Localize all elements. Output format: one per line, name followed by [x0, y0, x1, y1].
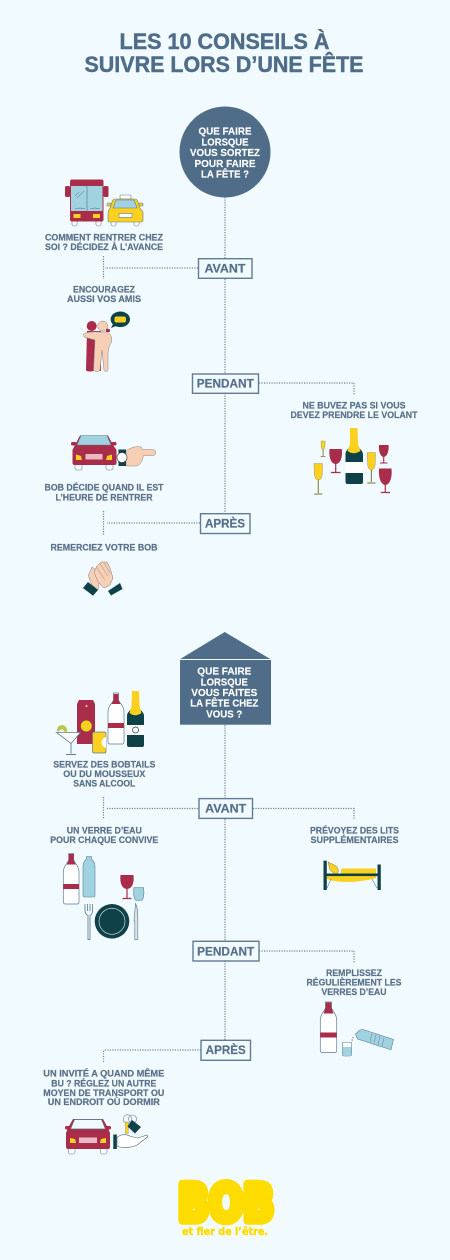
- can: [92, 732, 106, 753]
- flutes: [321, 441, 325, 450]
- water bottle: [83, 856, 95, 897]
- house: que faire lorsque vous faites la fête: VOUS ?: [206, 709, 242, 721]
- bottle: [63, 854, 79, 904]
- label: avant: AVANT: [204, 263, 246, 275]
- fork: [85, 904, 92, 940]
- label: après: [200, 514, 250, 534]
- text: prévoyez: [310, 825, 399, 845]
- label: après: APRÈS: [205, 518, 245, 531]
- house: que faire lorsque vous faites la fête: [180, 632, 271, 725]
- title: SUIVRE LORS D’UNE FÊTE: [84, 52, 364, 77]
- text: encouragez: [67, 284, 141, 304]
- text: un verre d'eau: POUR CHAQUE CONVIVE: [50, 835, 158, 845]
- water glass: [134, 888, 144, 900]
- text: comment rentrer: COMMENT RENTRER CHEZ: [45, 232, 163, 242]
- text: servez: SANS ALCOOL: [73, 778, 136, 788]
- icon: clapping hands: [83, 562, 122, 596]
- icon: hand with keys: [113, 1115, 148, 1149]
- label: pendant 2: PENDANT: [197, 946, 254, 958]
- circle: que faire lorsque vous sortez: POUR FAIRE: [194, 158, 256, 170]
- carton: [77, 700, 95, 744]
- text: un verre d'eau: UN VERRE D’EAU: [67, 825, 142, 835]
- label: après 2: APRÈS: [206, 1044, 246, 1057]
- text: remplissez: RÉGULIÈREMENT LES: [306, 978, 402, 988]
- house: que faire lorsque vous faites la fête: LORSQUE: [201, 676, 248, 688]
- text: prévoyez: SUPPLÉMENTAIRES: [310, 835, 398, 845]
- label: avant 2: [199, 799, 252, 818]
- icon: bus: [65, 180, 108, 226]
- circle: que faire lorsque vous sortez: LA FÊTE ?: [201, 168, 249, 181]
- label: après 2: [201, 1040, 250, 1060]
- text: remplissez: VERRES D’EAU: [322, 987, 386, 997]
- text: bob décide: L’HEURE DE RENTRER: [56, 492, 153, 502]
- text: remplissez: REMPLISSEZ: [326, 968, 382, 978]
- house: que faire lorsque vous faites la fête: LA FÊTE CHEZ: [190, 697, 259, 710]
- champagne: [127, 691, 144, 747]
- text: ne buvez pas: [290, 400, 418, 420]
- text: un invité: UN INVITÉ A QUAND MÊME: [43, 1068, 164, 1079]
- title: LES 10 CONSEILS À: [120, 29, 330, 54]
- text: ne buvez pas: NE BUVEZ PAS SI VOUS: [302, 400, 406, 410]
- text: un invité: UN ENDROIT OÙ DORMIR: [48, 1096, 160, 1107]
- icon: speech bubble BOB: [111, 312, 130, 328]
- text: comment rentrer: SOI ? DÉCIDEZ À L’AVANCE: [45, 242, 163, 252]
- label: pendant 2: [193, 941, 259, 961]
- house: que faire lorsque vous faites la fête: VOUS FAITES: [191, 687, 257, 699]
- text: remerciez: REMERCIEZ VOTRE BOB: [50, 542, 158, 552]
- timeline: chez vous: [104, 725, 354, 1062]
- timeline: sortir: [104, 197, 354, 535]
- label: pendant: PENDANT: [197, 379, 254, 391]
- label: avant: [198, 259, 252, 278]
- icon: soft drinks: [56, 691, 144, 754]
- text: un invité: BU ? RÉGLEZ UN AUTRE: [51, 1078, 156, 1088]
- icon: bed: [324, 861, 381, 890]
- icon: car 2: [65, 1119, 111, 1154]
- text: un invité: MOYEN DE TRANSPORT OU: [43, 1088, 164, 1098]
- circle: que faire lorsque vous sortez: VOUS SORTEZ: [190, 147, 261, 159]
- text: bob décide: [44, 482, 164, 502]
- icon: friends hugging: [84, 321, 112, 372]
- wine glass: [120, 875, 134, 889]
- logo: BOB: BOB: [178, 1174, 274, 1232]
- logo: BOB: et fier de l’être.: [182, 1226, 268, 1238]
- icon: watch and pointing hand: [117, 447, 156, 466]
- plate: [95, 904, 129, 939]
- text: encouragez: AUSSI VOS AMIS: [67, 294, 141, 304]
- text: ne buvez pas: DEVEZ PRENDRE LE VOLANT: [290, 410, 418, 420]
- icon: table setting: [63, 854, 144, 940]
- text: servez: OU DU MOUSSEUX: [63, 769, 145, 779]
- text: un invité: [43, 1068, 164, 1107]
- knife: [134, 904, 138, 940]
- text: bob décide: BOB DÉCIDE QUAND IL EST: [44, 482, 164, 492]
- house: que faire lorsque vous faites la fête: QUE FAIRE: [197, 666, 251, 678]
- circle: que faire lorsque vous sortez: [180, 106, 270, 198]
- icon: filling water glass: [320, 1002, 394, 1056]
- icon: taxi: [107, 195, 143, 226]
- wine glasses: [329, 449, 342, 464]
- text: prévoyez: PRÉVOYEZ DES LITS: [310, 825, 399, 835]
- text: remplissez: [306, 968, 402, 997]
- text: comment rentrer: [45, 232, 163, 252]
- circle: que faire lorsque vous sortez: QUE FAIRE: [198, 126, 252, 138]
- text: un verre d'eau: [50, 825, 158, 845]
- label: pendant: [192, 374, 258, 393]
- text: servez: SERVEZ DES BOBTAILS: [53, 759, 155, 769]
- icon: car: [71, 436, 116, 470]
- circle: que faire lorsque vous sortez: LORSQUE: [202, 136, 248, 148]
- icon: champagne bottle and glasses: [314, 428, 392, 494]
- text: encouragez: ENCOURAGEZ: [73, 284, 135, 294]
- title: [84, 29, 364, 77]
- text: servez: [53, 759, 155, 788]
- bottle: [108, 693, 124, 744]
- label: avant 2: AVANT: [205, 803, 246, 815]
- cocktail: [57, 725, 67, 735]
